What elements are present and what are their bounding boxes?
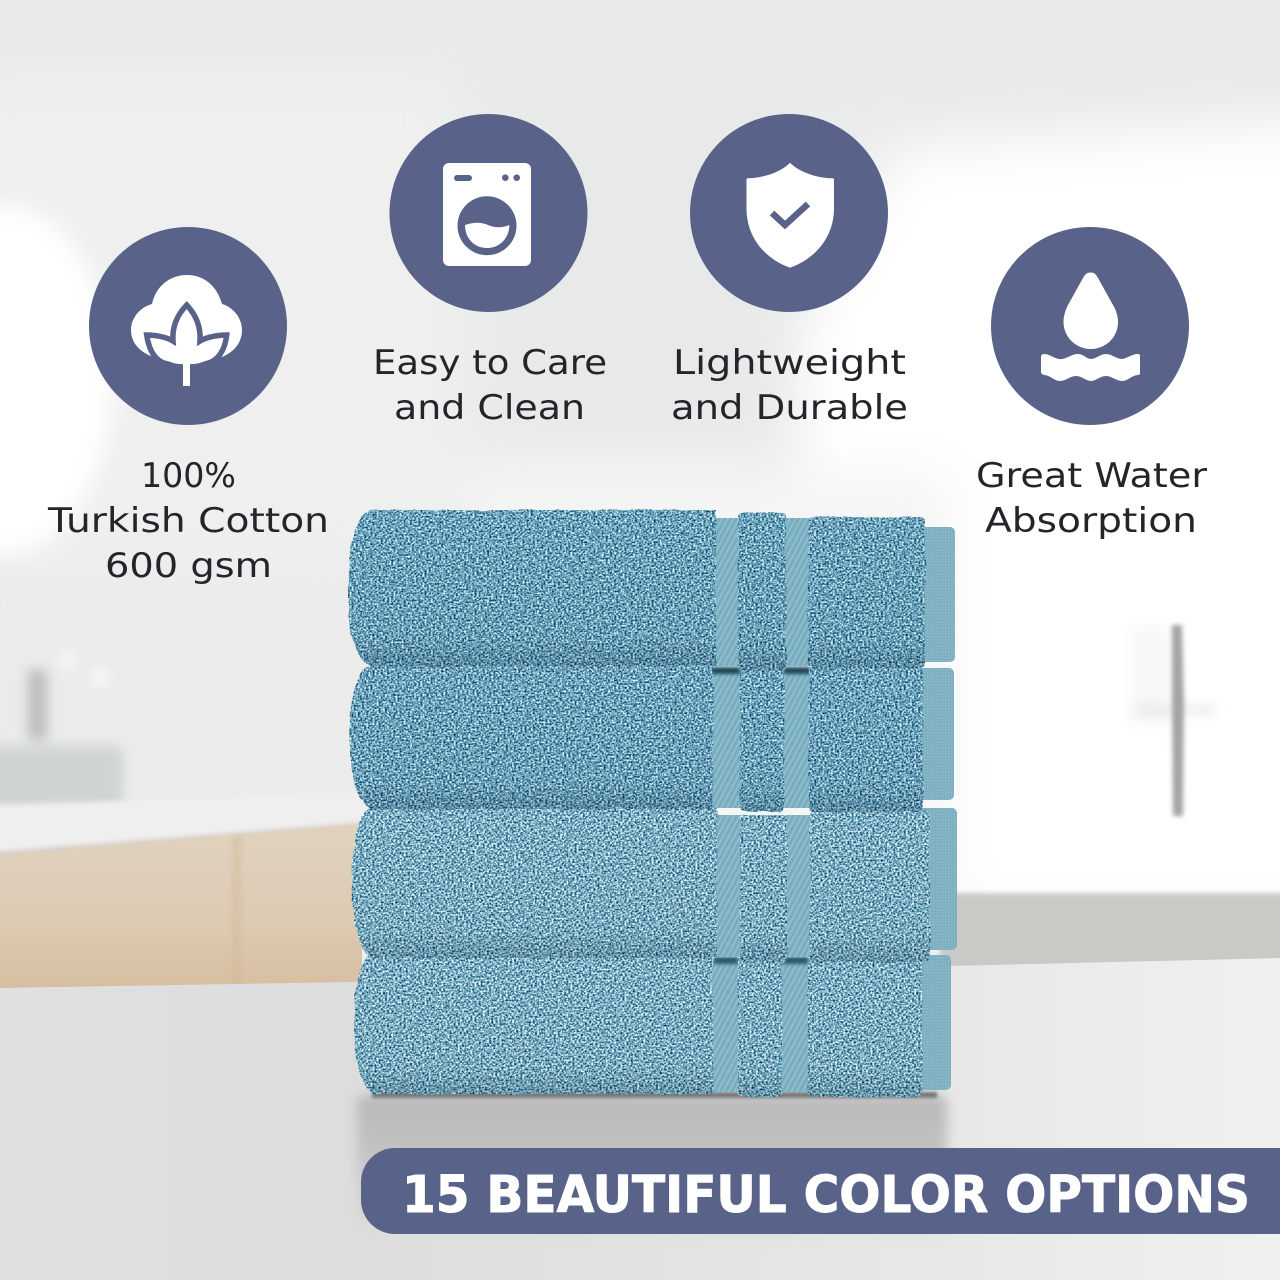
icon: washing machine bbox=[390, 114, 588, 312]
icon: shield with check bbox=[690, 114, 888, 312]
text: Easy to Care and Clean: and Clean bbox=[394, 388, 585, 428]
towel 1 (top) bbox=[348, 510, 955, 670]
icon: water drop on waves bbox=[991, 227, 1189, 425]
text: Lightweight and Durable bbox=[671, 343, 908, 428]
text: 100% Turkish Cotton 600 gsm: 100% bbox=[141, 456, 236, 496]
text: 100% Turkish Cotton 600 gsm: Turkish Cotton bbox=[47, 501, 329, 541]
contact shadow bbox=[372, 1092, 937, 1098]
text: 100% Turkish Cotton 600 gsm bbox=[47, 456, 329, 586]
text: Great Water Absorption bbox=[976, 456, 1207, 541]
towel 3 bbox=[352, 806, 957, 962]
text: Great Water Absorption: Absorption bbox=[985, 501, 1197, 541]
text: 100% Turkish Cotton 600 gsm: 600 gsm bbox=[105, 546, 272, 586]
text: Great Water Absorption: Great Water bbox=[976, 456, 1207, 496]
towel stack reflection bbox=[357, 1096, 947, 1246]
text: Lightweight and Durable: and Durable bbox=[671, 388, 908, 428]
banner: 15 beautiful color options bbox=[361, 1148, 1280, 1234]
text: Lightweight and Durable: Lightweight bbox=[673, 343, 906, 383]
towel 4 (bottom) bbox=[354, 952, 951, 1097]
text: Easy to Care and Clean: Easy to Care bbox=[373, 343, 607, 383]
text: Easy to Care and Clean bbox=[373, 343, 607, 428]
banner: 15 beautiful color options: 15 BEAUTIFUL COLOR OPTIONS bbox=[402, 1166, 1250, 1225]
panel: stack of four blue towels bbox=[348, 510, 957, 1098]
wood cabinet bbox=[0, 824, 362, 990]
icon: cotton boll bbox=[89, 227, 287, 425]
towel 2 bbox=[350, 665, 954, 812]
countertop bbox=[0, 958, 1280, 1280]
